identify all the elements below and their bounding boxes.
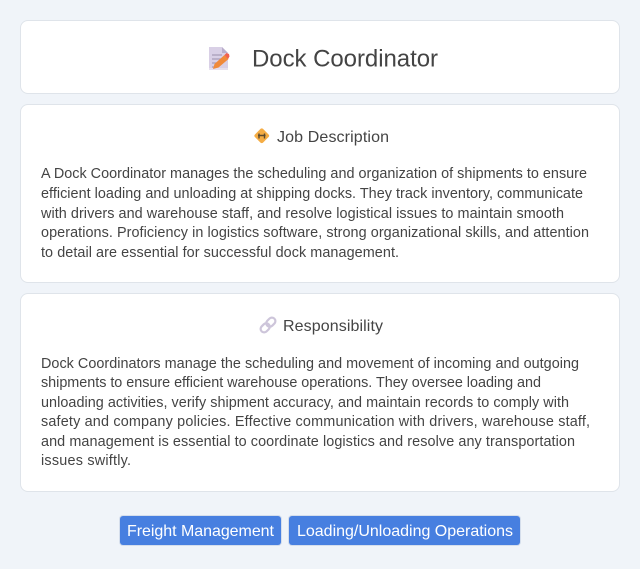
text block: responsibility: Dock Coordinators manage the scheduling and movement of incoming and outgoing [41, 356, 579, 372]
tag: loading/unloading operations: Loading/Unloading Operations [297, 523, 513, 540]
icon: chain link [259, 316, 277, 334]
text block: job description [40, 166, 589, 261]
tag: loading/unloading operations [289, 516, 520, 545]
text block: responsibility: unloading activities, verify shipment accuracy, and maintain records to comply with [41, 395, 569, 411]
icon: document with pencil [209, 47, 230, 70]
text block: responsibility [41, 356, 590, 469]
tag: freight management [120, 516, 281, 545]
text block: responsibility: issues swiftly. [41, 453, 131, 469]
text block: responsibility: shipments to ensure efficient warehouse operations. They oversee loading and [41, 375, 541, 391]
text block: job description: operations. Proficiency in logistics software, strong organizational skills, and attention [41, 225, 589, 241]
text block: job description: to detail are essential for successful dock management. [41, 245, 399, 261]
panel: title card [20, 20, 620, 94]
panel: responsibility [20, 293, 620, 492]
title text: Dock Coordinator [252, 46, 438, 72]
text block: job description: with drivers and warehouse staff, and resolve logistical issues to maintain smooth [40, 206, 564, 222]
panel content: responsibility [41, 316, 590, 469]
heading: job description: Job Description [277, 129, 389, 146]
panel: job description [20, 104, 620, 283]
text block: responsibility: safety and company policies. Effective communication with drivers, warehouse staff, [41, 414, 590, 430]
text block: job description: A Dock Coordinator manages the scheduling and organization of shipments to ensure [41, 166, 587, 182]
text block: job description: efficient loading and unloading at shipping docks. They track inventory, communicate [41, 186, 583, 202]
icon: construction sign [254, 128, 270, 144]
text block: responsibility: and management is essential to coordinate logistics and resolve any transportation [41, 434, 575, 450]
panel content: job description [40, 128, 589, 261]
title group [209, 46, 438, 72]
heading: responsibility: Responsibility [283, 318, 383, 335]
tag: freight management: Freight Management [127, 523, 275, 540]
